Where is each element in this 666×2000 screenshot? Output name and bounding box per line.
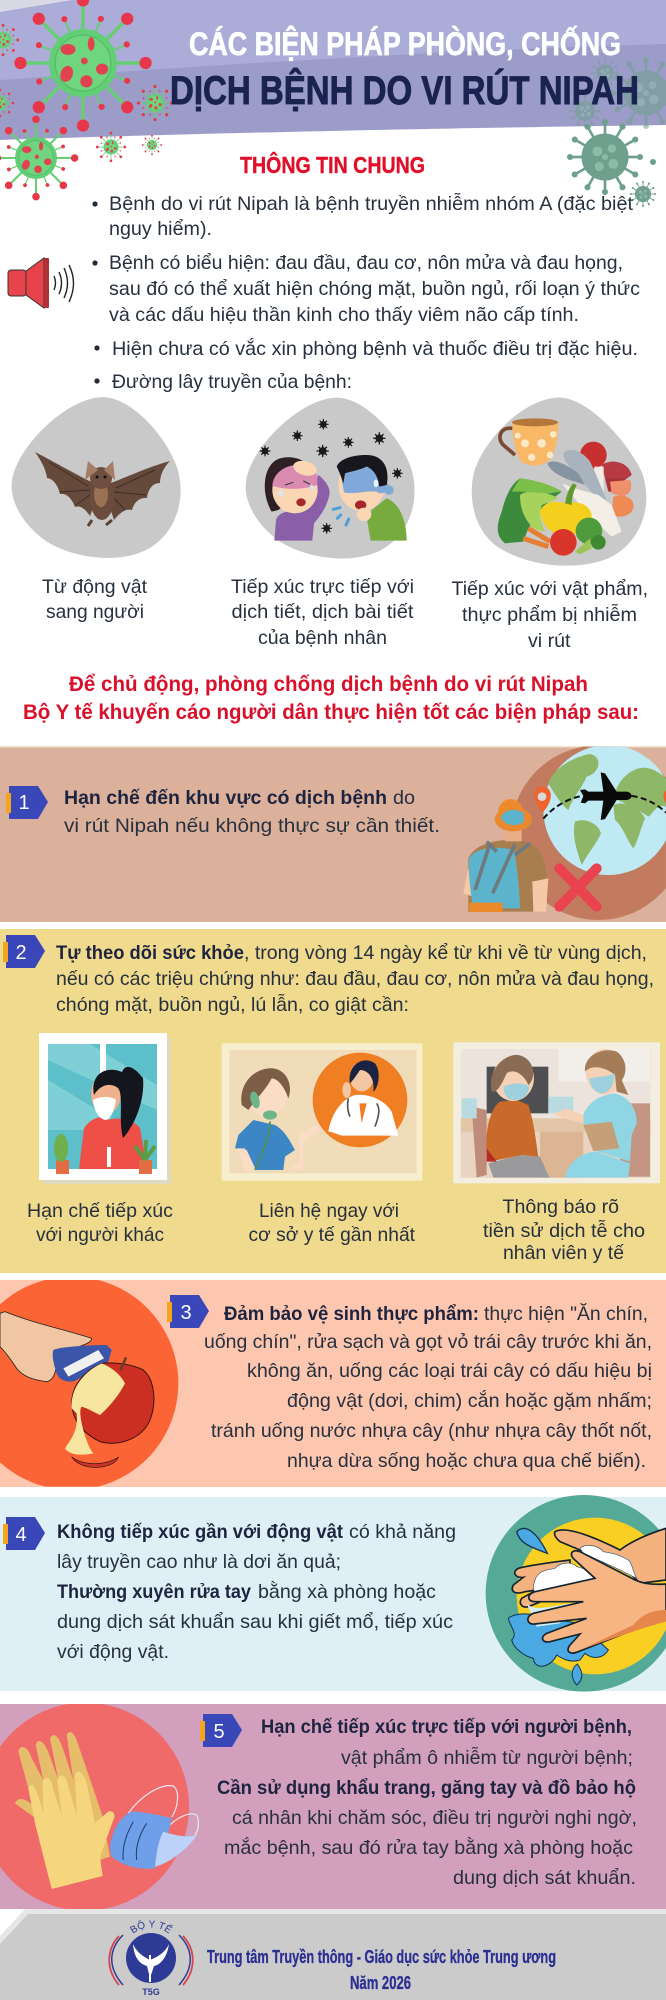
panel 5 text: cá nhân khi chăm sóc, điều trị người nghi ngờ, — [232, 1807, 637, 1829]
caption: limit contact — [27, 1200, 173, 1246]
panel 1 text: Hạn chế đến khu vực có dịch bệnh — [64, 787, 387, 809]
route 3 caption: Tiếp xúc với vật phẩm, — [452, 578, 648, 600]
recommendation heading: Bộ Y tế khuyến cáo người dân thực hiện tốt các biện pháp sau: — [23, 700, 639, 724]
caption: inform epidemiological history: Thông báo rõ — [502, 1196, 619, 1218]
panel 4 text: Không tiếp xúc gần với động vật — [57, 1521, 343, 1543]
caption: contact health facility: Liên hệ ngay với — [259, 1200, 399, 1222]
footer text — [207, 1946, 556, 1993]
title — [170, 26, 639, 113]
general information bullets — [92, 192, 640, 393]
general information bullets: nguy hiểm). — [109, 218, 212, 240]
panel 3 text: động vật (dơi, chim) cắn hoặc gặm nhấm; — [287, 1389, 652, 1412]
route 2 caption: của bệnh nhân — [258, 627, 387, 649]
caption: inform epidemiological history: nhân viên y tế — [503, 1242, 624, 1264]
panel 3 text: không ăn, uống các loại trái cây có dấu hiệu bị — [247, 1360, 652, 1382]
panel 4: avoid animals, wash hands — [0, 1495, 666, 1692]
route 1: bat, animal to human — [12, 397, 181, 558]
route 2: sick people coughing — [246, 398, 415, 558]
panel 3 text: Đảm bảo vệ sinh thực phẩm: — [224, 1303, 479, 1325]
badge 5 — [200, 1714, 242, 1747]
panel 2 text: nếu có các triệu chứng như: đau đầu, đau cơ, nôn mửa và đau họng, — [56, 968, 654, 990]
caption: contact health facility: cơ sở y tế gần nhất — [248, 1224, 416, 1246]
caption: inform epidemiological history: tiền sử dịch tễ cho — [483, 1219, 645, 1242]
panel 4 text: dung dịch sát khuẩn sau khi giết mổ, tiếp xúc — [57, 1611, 453, 1633]
virus cluster: left, green and red — [0, 0, 173, 200]
panel 5 text: mắc bệnh, sau đó rửa tay bằng xà phòng hoặc — [224, 1836, 633, 1859]
recommendation heading: Để chủ động, phòng chống dịch bệnh do vi rút Nipah — [69, 672, 588, 696]
panel 1: avoid epidemic areas — [0, 745, 666, 922]
panel 1 text: vi rút Nipah nếu không thực sự cần thiết. — [64, 815, 440, 837]
panel 3 text: nhựa dừa sống hoặc chưa qua chế biến). — [287, 1450, 646, 1472]
general information bullets: Đường lây truyền của bệnh: — [112, 371, 352, 393]
footer logo: BỘ Y TẾ — [130, 1920, 174, 1934]
panel 4 text: với động vật. — [57, 1641, 169, 1663]
footer text: Năm 2026 — [350, 1972, 411, 1993]
route 2 caption: dịch tiết, dịch bài tiết — [232, 601, 414, 623]
general information bullets: và các dấu hiệu thần kinh cho thấy viêm não cấp tính. — [109, 304, 579, 326]
panel 5: limit contact with patients — [0, 1703, 666, 1911]
footer band — [0, 1909, 666, 2000]
badge 1 — [6, 786, 48, 819]
header banner — [0, 0, 666, 140]
panel 5 text — [217, 1716, 637, 1889]
illustration: phoning the clinic — [222, 1043, 422, 1181]
illustration: washing hands — [486, 1495, 666, 1692]
footer logo — [108, 1920, 194, 1997]
illustration: woman at window — [39, 1033, 171, 1184]
footer logo: T5G — [142, 1987, 160, 1997]
badge 2: 2 — [15, 942, 27, 964]
route 2 caption — [231, 576, 414, 649]
route 3 caption: vi rút — [528, 630, 571, 652]
panel 3 text: tránh uống nước nhựa cây (như nhựa cây thốt nốt, — [211, 1420, 652, 1442]
general information bullets: Bệnh do vi rút Nipah là bệnh truyền nhiễm nhóm A (đặc biệt — [109, 192, 634, 215]
panel 2 text: chóng mặt, buồn ngủ, lú lẫn, co giật cần: — [56, 993, 409, 1016]
panel 4 text: bằng xà phòng hoặc — [258, 1580, 436, 1603]
general information bullets: Bệnh có biểu hiện: đau đầu, đau cơ, nôn mửa và đau họng, — [109, 252, 623, 274]
panel 5 text: dung dịch sát khuẩn. — [453, 1867, 636, 1889]
icon: speaker — [8, 258, 74, 308]
badge 4: 4 — [15, 1524, 27, 1546]
heading: general information: THÔNG TIN CHUNG — [240, 151, 425, 178]
badge 1: 1 — [18, 792, 30, 814]
illustration: gloves and mask — [0, 1703, 198, 1911]
badge 2 — [3, 935, 45, 968]
caption: contact health facility — [248, 1200, 416, 1246]
route 3: contaminated food — [472, 398, 646, 566]
panel 4 text: lây truyền cao như là dơi ăn quả; — [57, 1551, 341, 1573]
panel 4 text — [57, 1521, 456, 1663]
panel 5 text: Cần sử dụng khẩu trang, găng tay và đồ bảo hộ — [217, 1777, 636, 1799]
panel 4 text: có khả năng — [349, 1521, 456, 1543]
panel 1 text: do — [393, 787, 415, 809]
panel 3 text: uống chín", rửa sạch và gọt vỏ trái cây trước khi ăn, — [204, 1331, 652, 1353]
panel 2 text — [56, 942, 654, 1016]
badge 4 — [3, 1517, 45, 1550]
panel 1 text — [64, 787, 440, 837]
panel 3: food hygiene — [0, 1277, 666, 1490]
virus cluster: right, muted — [567, 57, 666, 207]
route 3 caption — [452, 578, 648, 652]
illustration: peeling an apple — [0, 1277, 178, 1490]
panel 5 text: Hạn chế tiếp xúc trực tiếp với người bệnh, — [261, 1716, 632, 1738]
panel 3 text: thực hiện "Ăn chín, — [484, 1302, 648, 1325]
badge 5: 5 — [213, 1721, 225, 1743]
panel 3 text — [204, 1302, 652, 1472]
route 2 caption: Tiếp xúc trực tiếp với — [231, 576, 414, 598]
badge 3: 3 — [180, 1302, 192, 1324]
route 1 caption: Từ động vật — [42, 576, 148, 598]
route 1 caption — [42, 576, 148, 623]
caption: inform epidemiological history — [483, 1196, 645, 1264]
panel 4 text: Thường xuyên rửa tay — [57, 1581, 251, 1603]
general information bullets: Hiện chưa có vắc xin phòng bệnh và thuốc điều trị đặc hiệu. — [112, 337, 638, 360]
badge 3 — [167, 1295, 209, 1328]
caption: limit contact: Hạn chế tiếp xúc — [27, 1200, 173, 1222]
recommendation heading — [23, 672, 639, 724]
illustration: informing medical staff — [453, 1042, 660, 1183]
route 1 caption: sang người — [46, 601, 144, 623]
panel 5 text: vật phẩm ô nhiễm từ người bệnh; — [341, 1746, 633, 1769]
panel 2: self-monitor health — [0, 929, 666, 1273]
panel 2 text: Tự theo dõi sức khỏe — [56, 942, 244, 964]
panel 2 text: , trong vòng 14 ngày kể từ khi về từ vùng dịch, — [244, 942, 647, 964]
general information bullets: sau đó có thể xuất hiện chóng mặt, buồn ngủ, rối loạn ý thức — [109, 278, 640, 300]
illustration: traveller and globe — [463, 745, 666, 920]
caption: limit contact: với người khác — [36, 1224, 164, 1246]
route 3 caption: thực phẩm bị nhiễm — [462, 603, 637, 626]
